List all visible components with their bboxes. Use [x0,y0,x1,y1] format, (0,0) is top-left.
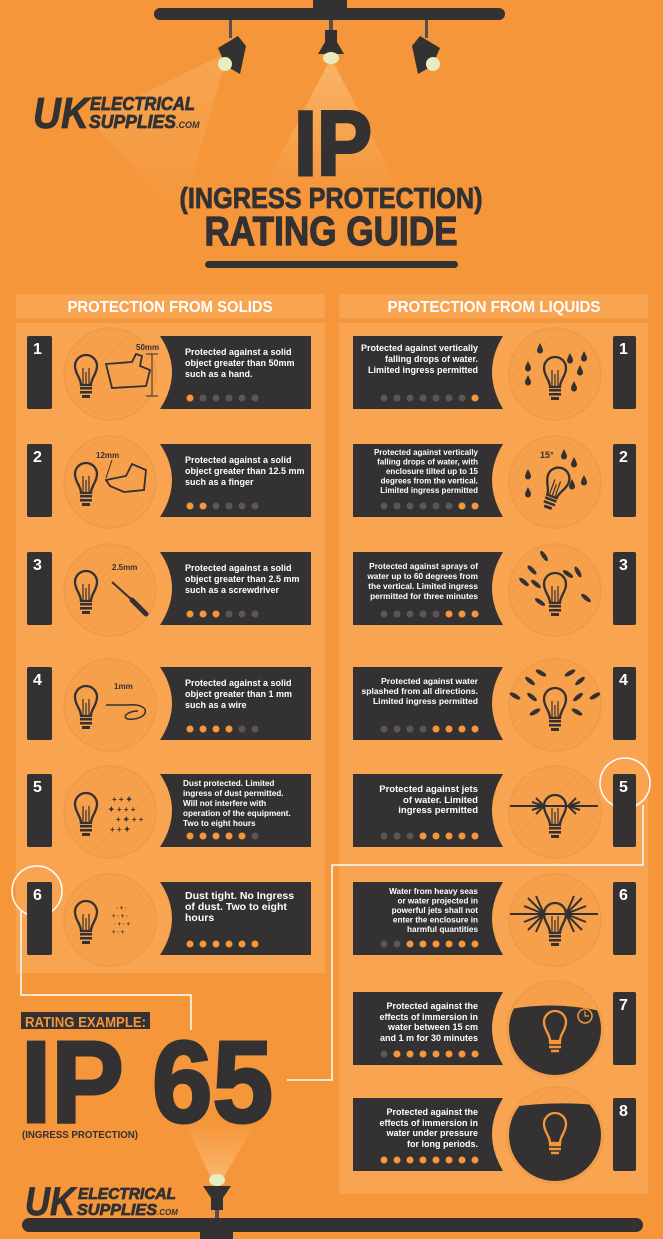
liquid row 4: 4 [619,672,628,689]
logo top: UK [33,89,92,138]
liquid row 3 [353,544,636,636]
solid row 2: 12mm [96,451,119,460]
liquid row 3: 3 [619,557,628,574]
logo bottom [25,1180,178,1224]
liquid row 8: 8 [619,1103,628,1120]
liquid row 2: Protected against vertically [374,448,479,457]
logo top: .COM [176,120,200,130]
solid row 1: such as a hand. [185,369,253,379]
solids rows [27,328,311,966]
panel: liquids [339,294,648,1194]
solid row 6: of dust. Two to eight [185,901,287,913]
panel: solids [16,294,325,973]
liquids rows [353,328,636,1190]
solid row 5: Will not interfere with [183,799,266,808]
liquid row 2: falling drops of water, with [377,458,478,466]
solid row 3: such as a screwdriver [185,585,280,595]
liquid row 7: water between 15 cm [387,1022,478,1032]
liquid row 7: effects of immersion in [379,1012,478,1022]
liquid row 1 [353,328,636,420]
solid row 1: 50mm [136,343,159,352]
IP 65 big text: IP 65 [21,1017,273,1147]
rating example label: RATING EXAMPLE: [25,1014,146,1031]
solid row 4: 1mm [114,682,133,691]
solid row 4: object greater than 1 mm [185,689,292,699]
liquid row 5: ingress permitted [398,805,478,816]
panel: solids: PROTECTION FROM SOLIDS [68,299,273,316]
liquid row 3: water up to 60 degrees from [366,571,478,581]
title [180,93,482,268]
solid row 6: + · + · [112,914,128,920]
liquid row 6: powerful jets shall not [392,906,478,915]
icon: immersion 7 [505,981,605,1080]
liquid row 2: 2 [619,449,628,466]
title: (INGRESS PROTECTION) [180,183,482,215]
panel: liquids: PROTECTION FROM LIQUIDS [388,299,601,316]
solid row 1 [27,328,311,420]
liquid row 3: permitted for three minutes [370,591,478,601]
solid row 2: Protected against a solid [185,455,292,465]
solid row 4: 4 [33,672,42,689]
liquid row 5: of water. Limited [403,795,478,806]
liquid row 1: Limited ingress permitted [368,365,478,375]
solid row 3: Protected against a solid [185,563,292,573]
light cone bottom [185,1124,255,1180]
liquid row 1: Protected against vertically [361,343,478,353]
solid row 6: + · + [112,930,125,936]
solid row 6: hours [185,912,214,924]
solid row 2: such as a finger [185,477,254,487]
bottom bar [22,1218,643,1239]
liquid row 4: Limited ingress permitted [373,696,478,706]
IP 65 big text: (INGRESS PROTECTION) [22,1129,138,1141]
solid row 6: Dust tight. No Ingress [185,890,294,902]
title: RATING GUIDE [204,208,458,254]
logo bottom: SUPPLIES [77,1202,157,1219]
ceiling light bar [154,0,505,74]
logo bottom: .COM [157,1208,178,1217]
liquid row 7: 7 [619,997,628,1014]
liquid row 2: 15° [540,450,554,460]
solid row 3: 3 [33,557,42,574]
liquid row 4: Protected against water [381,676,479,686]
logo bottom: UK [25,1180,78,1224]
liquid row 3: Protected against sprays of [369,561,478,571]
solid row 5: Dust protected. Limited [183,779,274,788]
liquid row 6: or water projected in [397,896,478,906]
liquid row 4: splashed from all directions. [361,686,478,696]
bottom lamp [203,1174,231,1220]
liquid row 7: and 1 m for 30 minutes [380,1033,478,1043]
lamp right [412,20,440,74]
icon: immersion 8 [505,1087,605,1190]
solid row 5 [27,766,311,858]
liquid row 5: 5 [619,779,628,796]
liquid row 4 [353,659,636,751]
solid row 5: Two to eight hours [183,819,256,828]
liquid row 5: Protected against jets [379,784,478,795]
solid row 1: Protected against a solid [185,347,292,357]
solid row 5: 5 [33,779,42,796]
lamp left [218,20,246,74]
liquid row 8: effects of immersion in [379,1118,478,1128]
liquid row 2: Limited ingress permitted [380,486,478,495]
solid row 3: 2.5mm [112,563,137,572]
solid row 2: 2 [33,449,42,466]
solid row 2 [27,436,311,528]
solid row 5: ingress of dust permitted. [183,789,284,798]
solid row 1: object greater than 50mm [185,358,295,368]
liquid row 6: Water from heavy seas [389,887,478,896]
solid row 2: object greater than 12.5 mm [185,466,305,476]
liquid row 2 [353,436,636,528]
solid row 5: ✦ + + + [108,805,136,814]
solid row 4: such as a wire [185,700,247,710]
liquid row 3: the vertical. Limited ingress [368,581,478,591]
liquid row 7 [353,992,636,1065]
solid row 6 [27,874,311,966]
liquid row 8: Protected against the [386,1107,478,1117]
logo top: ELECTRICAL [90,94,195,114]
logo top [33,89,200,138]
liquid row 8: water under pressure [385,1128,478,1138]
light cones top [90,52,400,220]
liquid row 2: degrees from the vertical. [381,476,478,486]
liquid row 6: enter the enclosure in [393,916,478,924]
liquid row 2: enclosure tilted up to 15 [386,467,479,476]
solid row 3 [27,544,311,636]
solid row 5: + ✦ + + [116,815,144,824]
solid row 5: operation of the equipment. [183,809,291,818]
liquid row 1: 1 [619,341,628,358]
solid row 6: · + · + [114,922,131,928]
solid row 6: · + · [116,906,127,912]
solid row 1: 1 [33,341,42,358]
liquid row 6 [353,874,636,966]
liquid row 6: harmful quantities [407,925,478,934]
logo top: SUPPLIES [89,112,176,132]
title: IP [294,93,372,195]
liquid row 7: Protected against the [386,1001,478,1011]
liquid row 8: for long periods. [407,1139,478,1149]
liquid row 8 [353,1098,636,1171]
solid row 5: + + ✦ [112,795,133,804]
solid row 6: 6 [33,887,42,904]
solid row 3: object greater than 2.5 mm [185,574,300,584]
lamp center [318,20,344,64]
solid row 5: + + ✦ [110,825,131,834]
solid row 4: Protected against a solid [185,678,292,688]
liquid row 1: falling drops of water. [385,354,478,364]
logo bottom: ELECTRICAL [78,1186,176,1203]
liquid row 6: 6 [619,887,628,904]
liquid row 5 [353,766,636,858]
connector lines [12,758,650,1080]
solid row 4 [27,659,311,751]
